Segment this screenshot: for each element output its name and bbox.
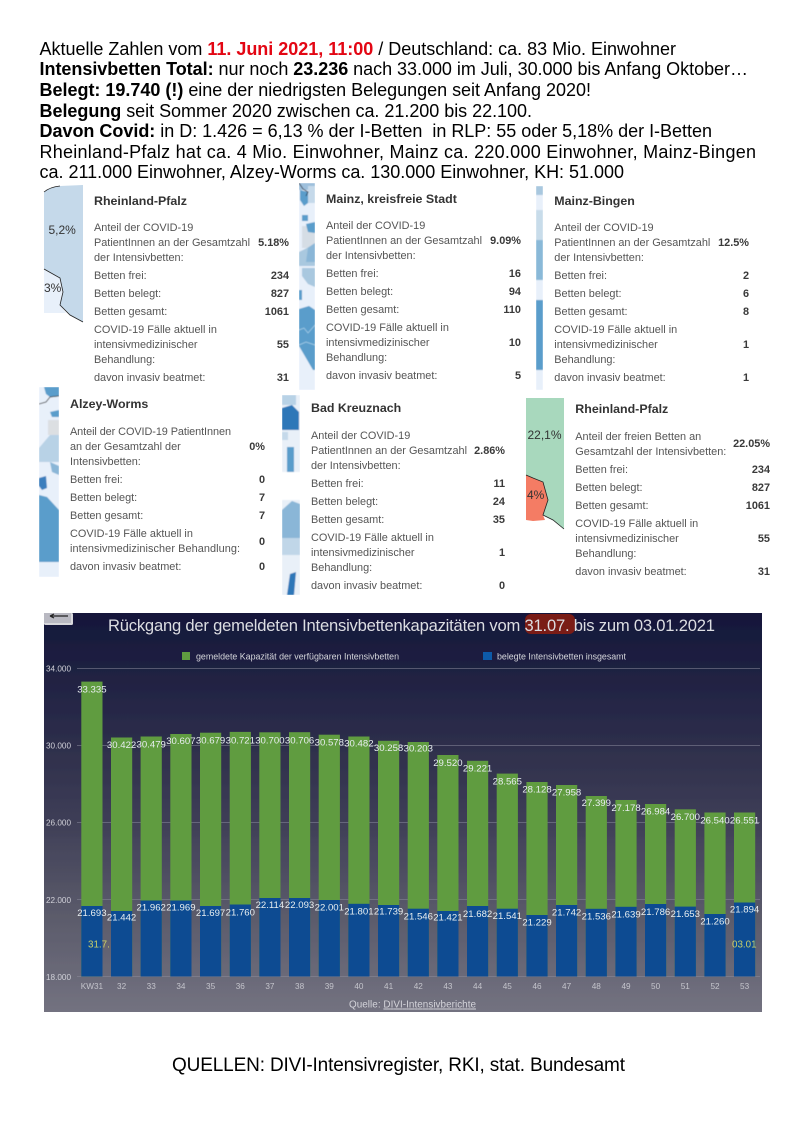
chart title: Rückgang der gemeldeten Intensivbettenkapazitäten vom 31.07. bis zum 03.01.2021 bbox=[108, 616, 715, 635]
y axis bbox=[46, 664, 760, 982]
panel: Mainz, kreisfreie Stadt: der Intensivbetten: bbox=[326, 250, 416, 262]
bars: 30.700 bbox=[255, 736, 285, 746]
map: Rheinland-Pfalz green and red bbox=[526, 398, 564, 529]
text block: current figures: ca. 211.000 Einwohner, Alzey-Worms ca. 130.000 Einwohner, KH: 51.000 bbox=[40, 162, 624, 182]
panel: Rheinland-Pfalz COVID share: COVID-19 Fälle aktuell in bbox=[94, 324, 217, 336]
bars: 27.399 bbox=[582, 798, 611, 809]
panel: Bad Kreuznach: 2.86% bbox=[474, 445, 505, 457]
bar chart: decline of reported ICU capacity bbox=[44, 613, 762, 1012]
text block: current figures: Belegung seit Sommer 2020 zwischen ca. 21.200 bis 22.100. bbox=[40, 101, 532, 121]
panel: Mainz, kreisfreie Stadt: Betten frei: bbox=[326, 268, 379, 280]
panel: Mainz, kreisfreie Stadt: PatientInnen an der Gesamtzahl bbox=[326, 235, 482, 247]
text block: current figures: Davon Covid: in D: 1.426 = 6,13 % der I-Betten in RLP: 55 oder 5,18% der I-Betten bbox=[40, 121, 712, 141]
bars: 42 bbox=[414, 982, 423, 991]
panel: Mainz-Bingen: 6 bbox=[743, 288, 749, 300]
bars: 26.551 bbox=[730, 816, 759, 826]
text block: current figures: Aktuelle Zahlen vom 11. Juni 2021, 11:00 / Deutschland: ca. 83 Mio. Einwohner bbox=[40, 39, 676, 59]
panel: Alzey-Worms: davon invasiv beatmet: bbox=[70, 561, 181, 573]
bars: 21.760 bbox=[226, 908, 255, 918]
panel: Rheinland-Pfalz COVID share: 1061 bbox=[265, 306, 289, 318]
panel: Bad Kreuznach: Anteil der COVID-19 bbox=[311, 430, 410, 442]
panel: Mainz-Bingen: 1 bbox=[743, 372, 749, 384]
panel: Mainz, kreisfreie Stadt: 5 bbox=[515, 370, 521, 382]
panel: Rheinland-Pfalz COVID share: 5.18% bbox=[258, 237, 289, 249]
panel: Rheinland-Pfalz COVID share: PatientInnen an der Gesamtzahl bbox=[94, 237, 250, 249]
bars: 29.221 bbox=[463, 764, 492, 774]
panel: Mainz-Bingen: 8 bbox=[743, 306, 749, 318]
panel: Rheinland-Pfalz COVID share: 234 bbox=[271, 270, 289, 282]
panel: Bad Kreuznach: Betten belegt: bbox=[311, 496, 378, 508]
panel: Mainz-Bingen: Betten belegt: bbox=[554, 288, 622, 300]
panel: Alzey-Worms: 0 bbox=[259, 561, 265, 573]
bars: 21.697 bbox=[196, 908, 225, 919]
panel: Rheinland-Pfalz free beds: 55 bbox=[758, 533, 770, 545]
bars: 52 bbox=[710, 982, 720, 991]
icon: back arrow button bbox=[44, 613, 73, 625]
panel: Bad Kreuznach: Behandlung: bbox=[311, 562, 372, 574]
panel: Bad Kreuznach: 35 bbox=[493, 514, 505, 526]
panel: Bad Kreuznach: 0 bbox=[499, 580, 505, 592]
bars: 28.128 bbox=[522, 784, 552, 796]
map: Alzey-Worms bbox=[39, 387, 59, 577]
bars: 21.653 bbox=[671, 909, 700, 920]
map: Bad Kreuznach bbox=[282, 395, 300, 595]
bars: 30.203 bbox=[404, 744, 433, 754]
bars: 21.739 bbox=[374, 906, 403, 918]
bars: 21.229 bbox=[522, 918, 552, 928]
panel: Mainz, kreisfreie Stadt: 10 bbox=[509, 337, 521, 349]
panel: Rheinland-Pfalz free beds: 1061 bbox=[746, 500, 770, 512]
text block: current figures: Belegt: 19.740 (!) eine der niedrigsten Belegungen seit Anfang 2020! bbox=[40, 80, 591, 100]
panel: Bad Kreuznach: der Intensivbetten: bbox=[311, 460, 401, 472]
legend: gemeldete Kapazität der verfügbaren Intensivbetten bbox=[196, 652, 399, 662]
bars: 30.578 bbox=[315, 738, 344, 748]
panel: Mainz, kreisfreie Stadt: Anteil der COVID-19 bbox=[326, 220, 425, 232]
bars: 33.335 bbox=[77, 684, 107, 696]
bars: 26.540 bbox=[700, 816, 730, 826]
bars: 53 bbox=[740, 982, 750, 991]
panel: Rheinland-Pfalz COVID share: der Intensivbetten: bbox=[94, 252, 184, 264]
panel: Bad Kreuznach: PatientInnen an der Gesamtzahl bbox=[311, 445, 467, 457]
panel: Mainz, kreisfreie Stadt: 110 bbox=[503, 304, 521, 316]
bars: 35 bbox=[206, 982, 216, 991]
panel: Alzey-Worms: 0% bbox=[249, 441, 265, 453]
text block: current figures: Rheinland-Pfalz hat ca. 4 Mio. Einwohner, Mainz ca. 220.000 Einwohner, Mainz-Bingen bbox=[40, 142, 756, 162]
panel: Rheinland-Pfalz free beds: intensivmedizinischer bbox=[575, 533, 679, 545]
bars: 32 bbox=[117, 982, 127, 991]
panel: Mainz-Bingen: COVID-19 Fälle aktuell in bbox=[554, 324, 677, 336]
bars: 30.479 bbox=[137, 740, 166, 750]
bars: 21.786 bbox=[641, 907, 670, 918]
panel: Mainz-Bingen: Betten gesamt: bbox=[554, 306, 628, 318]
panel: Rheinland-Pfalz free beds: 827 bbox=[752, 482, 770, 494]
panel: Rheinland-Pfalz COVID share: 827 bbox=[271, 288, 289, 300]
panel: Rheinland-Pfalz COVID share: 31 bbox=[277, 372, 289, 384]
panel: Rheinland-Pfalz free beds: Gesamtzahl der Intensivbetten: bbox=[575, 446, 726, 458]
panel: Rheinland-Pfalz COVID share: Betten frei: bbox=[94, 270, 147, 282]
panel: Mainz, kreisfreie Stadt: Betten gesamt: bbox=[326, 304, 399, 316]
panel: Rheinland-Pfalz COVID share bbox=[44, 185, 289, 384]
bars: 26.700 bbox=[671, 812, 700, 823]
panel: Mainz, kreisfreie Stadt: COVID-19 Fälle aktuell in bbox=[326, 322, 449, 334]
bars: 30.706 bbox=[285, 736, 314, 746]
panel: Alzey-Worms: Betten frei: bbox=[70, 474, 123, 486]
panel: Mainz-Bingen: intensivmedizinischer bbox=[554, 339, 658, 351]
bars: 50 bbox=[651, 982, 661, 991]
bars: 39 bbox=[325, 982, 334, 991]
panel: Rheinland-Pfalz free beds: davon invasiv beatmet: bbox=[575, 566, 687, 578]
bars: 22.114 bbox=[256, 900, 285, 911]
panel: Rheinland-Pfalz free beds: Betten gesamt: bbox=[575, 500, 649, 512]
panel: Bad Kreuznach: Betten frei: bbox=[311, 478, 364, 490]
bars: 30.258 bbox=[374, 743, 403, 754]
panel: Bad Kreuznach bbox=[282, 395, 505, 595]
panel: Alzey-Worms: Betten gesamt: bbox=[70, 510, 143, 522]
panel: Rheinland-Pfalz free beds: Rheinland-Pfalz bbox=[575, 402, 668, 416]
bars: 21.742 bbox=[552, 908, 581, 918]
bars: 21.801 bbox=[344, 906, 374, 918]
panel: Rheinland-Pfalz free beds: Anteil der freien Betten an bbox=[575, 431, 701, 443]
panel: Mainz-Bingen: Mainz-Bingen bbox=[554, 194, 635, 208]
bars: 40 bbox=[354, 982, 364, 991]
bars: 47 bbox=[562, 982, 572, 991]
bars: 30.422 bbox=[107, 740, 136, 751]
bars: 37 bbox=[265, 982, 275, 991]
panel: Mainz, kreisfreie Stadt: 16 bbox=[509, 268, 521, 280]
bars: 44 bbox=[473, 982, 483, 991]
panel: Mainz-Bingen: Anteil der COVID-19 bbox=[554, 222, 654, 234]
panel: Bad Kreuznach: Bad Kreuznach bbox=[311, 401, 401, 415]
panel: Rheinland-Pfalz free beds: Behandlung: bbox=[575, 548, 636, 560]
bars: 21.546 bbox=[404, 912, 433, 922]
panel: Rheinland-Pfalz free beds: Betten frei: bbox=[575, 464, 628, 476]
bars: 27.958 bbox=[552, 788, 581, 798]
panel: Mainz, kreisfreie Stadt: 9.09% bbox=[490, 235, 521, 247]
legend: belegte Intensivbetten insgesamt bbox=[497, 652, 627, 662]
bars: 21.639 bbox=[611, 910, 641, 920]
panel: Mainz-Bingen bbox=[536, 186, 749, 390]
map: Rheinland-Pfalz green and red: 4% bbox=[527, 488, 545, 502]
panel: Mainz-Bingen: 1 bbox=[743, 339, 749, 351]
panel: Rheinland-Pfalz free beds: 22.05% bbox=[733, 438, 770, 450]
map: Mainz-Bingen bbox=[536, 186, 543, 390]
panel: Mainz-Bingen: Behandlung: bbox=[554, 354, 615, 366]
legend bbox=[182, 652, 627, 662]
panel: Bad Kreuznach: COVID-19 Fälle aktuell in bbox=[311, 532, 434, 544]
map: Rheinland-Pfalz green and red: 22,1% bbox=[528, 428, 562, 442]
y axis: 26.000 bbox=[46, 818, 71, 828]
bars: 21.693 bbox=[77, 908, 107, 919]
panel: Mainz, kreisfreie Stadt: Behandlung: bbox=[326, 352, 387, 364]
bars: 21.969 bbox=[166, 902, 196, 914]
bars: 51 bbox=[681, 982, 690, 991]
text block: current figures bbox=[40, 39, 756, 182]
bars: 29.520 bbox=[433, 758, 463, 769]
panel: Rheinland-Pfalz COVID share: Betten gesamt: bbox=[94, 306, 167, 318]
panel: Mainz, kreisfreie Stadt: Betten belegt: bbox=[326, 286, 393, 298]
panel: Mainz, kreisfreie Stadt: Mainz, kreisfreie Stadt bbox=[326, 192, 457, 206]
panel: Bad Kreuznach: 24 bbox=[493, 496, 505, 508]
panel: Bad Kreuznach: Betten gesamt: bbox=[311, 514, 384, 526]
bars: 27.178 bbox=[611, 803, 641, 814]
panel: Alzey-Worms: Intensivbetten: bbox=[70, 456, 141, 468]
panel: Bad Kreuznach: intensivmedizinischer bbox=[311, 547, 415, 559]
bars: 33 bbox=[147, 982, 156, 991]
map: Rheinland-Pfalz blue bbox=[44, 185, 83, 322]
panel: Alzey-Worms: 0 bbox=[259, 536, 265, 548]
panel: Alzey-Worms: Betten belegt: bbox=[70, 492, 137, 504]
y axis: 30.000 bbox=[46, 742, 71, 750]
panel: Rheinland-Pfalz COVID share: intensivmedizinischer bbox=[94, 339, 198, 351]
panel: Rheinland-Pfalz free beds: COVID-19 Fälle aktuell in bbox=[575, 518, 698, 530]
bars: 22.001 bbox=[315, 902, 344, 914]
panel: Alzey-Worms: Anteil der COVID-19 PatientInnen bbox=[70, 426, 231, 438]
bars: 28.565 bbox=[493, 776, 522, 788]
text block: current figures: Intensivbetten Total: nur noch 23.236 nach 33.000 im Juli, 30.000 bis Anfang Oktober… bbox=[40, 59, 748, 79]
map: Rheinland-Pfalz blue: 5,2% bbox=[48, 223, 76, 237]
source line in chart: Quelle: DIVI-Intensivberichte bbox=[349, 1000, 476, 1010]
panel: Rheinland-Pfalz COVID share: 55 bbox=[277, 339, 289, 351]
panel: Alzey-Worms: 7 bbox=[259, 510, 265, 522]
date label end: 03.01 bbox=[732, 940, 757, 950]
bars: 21.541 bbox=[493, 911, 522, 922]
bars: 45 bbox=[503, 982, 512, 991]
bars: 21.260 bbox=[700, 916, 730, 928]
bars: 46 bbox=[532, 982, 542, 991]
bars: 21.894 bbox=[730, 904, 760, 916]
date label start: 31.7. bbox=[88, 940, 110, 950]
y axis: 22.000 bbox=[46, 896, 71, 905]
bars: 48 bbox=[592, 982, 601, 991]
panel: Rheinland-Pfalz COVID share: Anteil der COVID-19 bbox=[94, 222, 193, 234]
panel: Alzey-Worms: an der Gesamtzahl der bbox=[70, 441, 181, 453]
bars: 49 bbox=[621, 982, 631, 991]
bars: 30.679 bbox=[196, 736, 225, 746]
panel: Mainz-Bingen: 2 bbox=[743, 270, 749, 282]
panel: Mainz-Bingen: davon invasiv beatmet: bbox=[554, 372, 666, 384]
bars: 21.421 bbox=[433, 912, 463, 924]
bars: 41 bbox=[384, 982, 394, 991]
bars: KW31 bbox=[81, 982, 103, 991]
panel: Mainz, kreisfreie Stadt: intensivmedizinischer bbox=[326, 337, 430, 349]
panel: Rheinland-Pfalz free beds bbox=[526, 398, 770, 578]
panel: Rheinland-Pfalz COVID share: Rheinland-Pfalz bbox=[94, 194, 187, 208]
bars: 36 bbox=[236, 982, 245, 991]
panel: Mainz-Bingen: PatientInnen an der Gesamtzahl bbox=[554, 237, 710, 249]
bars: 26.984 bbox=[641, 806, 671, 818]
panel: Alzey-Worms: intensivmedizinischer Behandlung: bbox=[70, 543, 240, 555]
map: Rheinland-Pfalz blue: 3% bbox=[44, 281, 62, 295]
map: Mainz bbox=[299, 183, 315, 390]
y axis: 18.000 bbox=[46, 973, 71, 982]
bars bbox=[77, 682, 760, 991]
bars: 30.482 bbox=[344, 738, 374, 750]
bars: 21.536 bbox=[582, 912, 611, 922]
panel: Mainz-Bingen: der Intensivbetten: bbox=[554, 252, 644, 264]
panel: Rheinland-Pfalz COVID share: davon invasiv beatmet: bbox=[94, 372, 205, 384]
panel: Rheinland-Pfalz COVID share: Betten belegt: bbox=[94, 288, 161, 300]
panel: Alzey-Worms: COVID-19 Fälle aktuell in bbox=[70, 528, 193, 540]
panel: Alzey-Worms: 0 bbox=[259, 474, 265, 486]
bars: 21.962 bbox=[137, 902, 166, 914]
bars: 21.442 bbox=[107, 912, 136, 924]
panel: Bad Kreuznach: davon invasiv beatmet: bbox=[311, 580, 422, 592]
bars: 22.093 bbox=[285, 900, 314, 911]
panel: Rheinland-Pfalz free beds: Betten belegt: bbox=[575, 482, 643, 494]
bars: 30.607 bbox=[166, 736, 196, 747]
panel: Bad Kreuznach: 1 bbox=[499, 547, 505, 559]
panel: Mainz, kreisfreie Stadt bbox=[299, 183, 521, 390]
bars: 38 bbox=[295, 982, 305, 991]
footer: sources: QUELLEN: DIVI-Intensivregister, RKI, stat. Bundesamt bbox=[172, 1055, 626, 1076]
bars: 30.721 bbox=[226, 736, 255, 746]
panel: Alzey-Worms bbox=[39, 387, 265, 577]
bars: 43 bbox=[443, 982, 453, 991]
panel: Mainz-Bingen: Betten frei: bbox=[554, 270, 607, 282]
panel: Rheinland-Pfalz free beds: 31 bbox=[758, 566, 770, 578]
bars: 21.682 bbox=[463, 909, 492, 920]
panel: Mainz, kreisfreie Stadt: davon invasiv beatmet: bbox=[326, 370, 437, 382]
panel: Rheinland-Pfalz free beds: 234 bbox=[752, 464, 770, 476]
bars: 34 bbox=[176, 982, 186, 991]
panel: Bad Kreuznach: 11 bbox=[493, 478, 505, 490]
panel: Alzey-Worms: Alzey-Worms bbox=[70, 397, 148, 411]
panel: Alzey-Worms: 7 bbox=[259, 492, 265, 504]
panel: Mainz, kreisfreie Stadt: 94 bbox=[509, 286, 521, 298]
panel: Rheinland-Pfalz COVID share: Behandlung: bbox=[94, 354, 155, 366]
y axis: 34.000 bbox=[46, 664, 71, 674]
panel: Mainz-Bingen: 12.5% bbox=[718, 237, 749, 249]
